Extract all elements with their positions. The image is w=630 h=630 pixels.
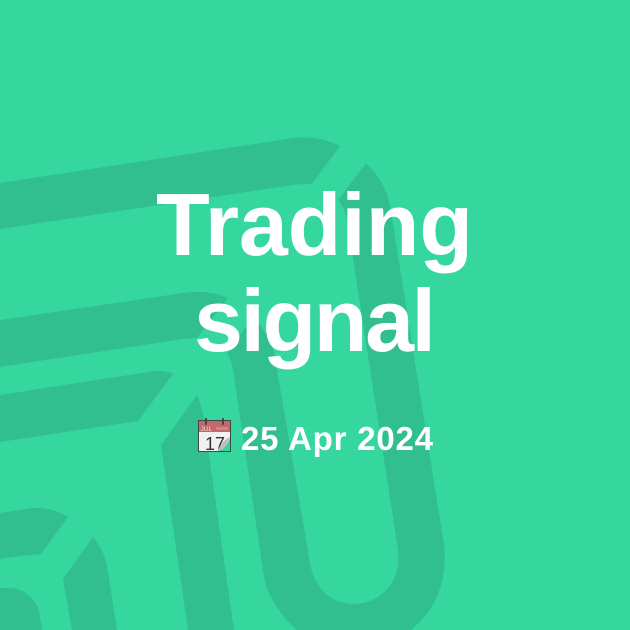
date: 25 Apr 2024: [241, 420, 434, 457]
band 4: [0, 508, 68, 559]
title line 2: signal: [194, 271, 436, 370]
corner shape: [0, 588, 42, 630]
icon: calendar: JUL: [200, 426, 212, 433]
band 2: [0, 292, 228, 367]
icon: calendar: 17: [205, 434, 225, 454]
large U shape: [227, 163, 445, 630]
band 3: [0, 371, 173, 442]
icon: calendar: [198, 418, 231, 454]
middle arm: [161, 395, 234, 630]
background logo pattern: [0, 137, 445, 630]
band 1: [0, 137, 340, 229]
title line 1: Trading: [156, 175, 473, 274]
title: [156, 175, 473, 370]
small arm: [63, 537, 117, 630]
